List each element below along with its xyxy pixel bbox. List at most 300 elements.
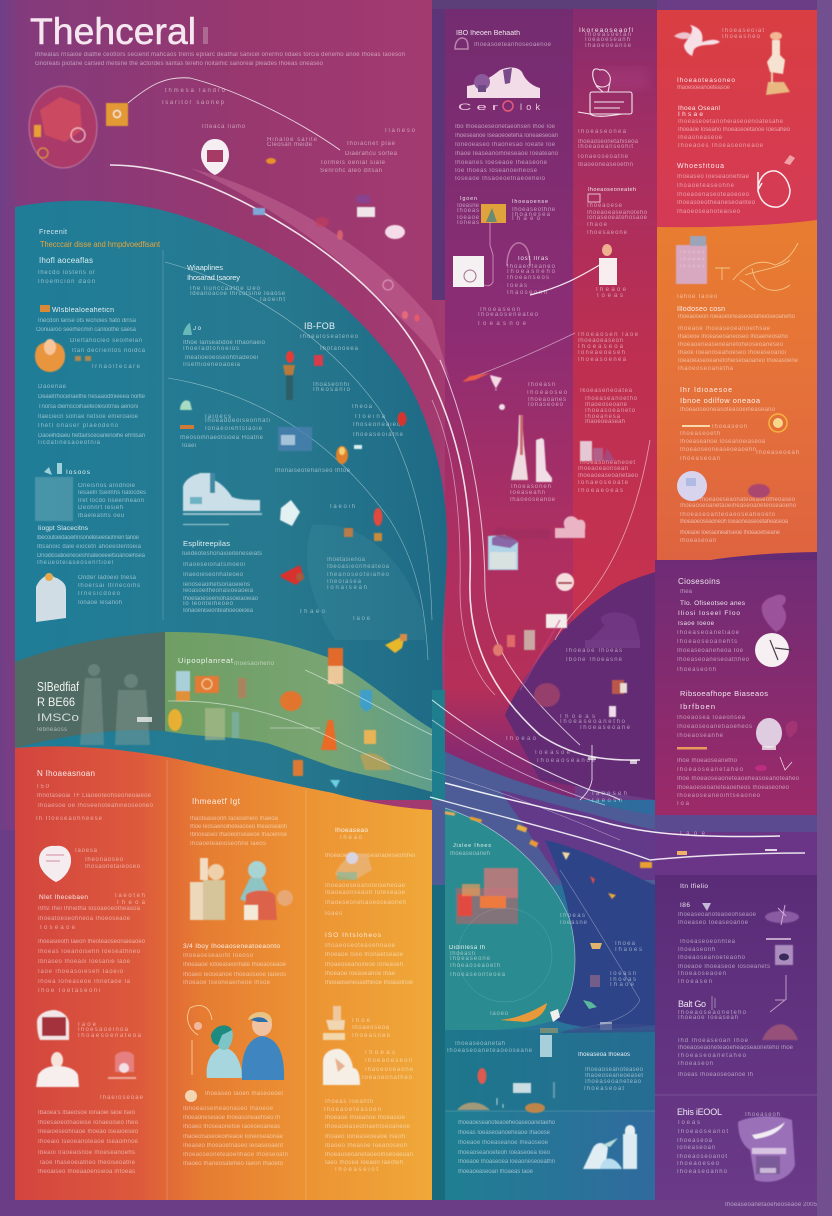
text block: orange column 3 middle: Ibnoe odilfow oneaoa	[680, 396, 761, 405]
text block: red column top: I50	[37, 784, 50, 790]
text block: orange column top: Ihmeaetf Igt	[192, 797, 241, 806]
text block: column 1 body: Ioneoeaseo Ihaonesao Ioeate Ioe	[455, 142, 556, 148]
text block: right purple middle: Ribsoeafhope Biaseaos	[680, 689, 768, 698]
text block: yellow column bottom: Ihoeas	[365, 1050, 395, 1056]
cluster: teal right markers: Ionaiseah	[327, 585, 367, 591]
text block: right purple top: Isaoe Ioeoe	[678, 621, 715, 627]
curve lines	[110, 78, 805, 1030]
text block: yellow column: Ibaoeaonseaoh Ioteseaoe	[325, 890, 406, 896]
text block and picture: column 1 row 2: Ihaeo	[512, 216, 541, 222]
text block: column 1 row 3: Iost Ilras	[518, 256, 548, 262]
text block: teal middle 2: Ihoeadoeoiseonhati	[205, 418, 270, 424]
text block: teal column A: Ilaeciecn solnae netsoe emeroaioe	[38, 414, 139, 420]
text block: right purple top: Ihoeaoseoanehts	[677, 639, 737, 645]
top chart labels: Ihoiacnet plae	[347, 141, 396, 147]
icon: white heart	[39, 846, 71, 882]
panel: lower blue field	[432, 690, 655, 1200]
text block: column 1 row 3: Ihoeasneho	[507, 269, 556, 275]
illustration: purple box figure	[738, 1116, 795, 1182]
illustration: orange and red blocks	[456, 868, 518, 924]
cluster: dark purple labels: Ihoeaseoane	[580, 725, 631, 731]
text block: teal middle 1	[183, 323, 266, 368]
text block: teal middle top: Ideanoacoe Ihrcotsine Ieaose	[190, 291, 286, 297]
text block: red column labels	[38, 848, 146, 994]
text block: orange column bottom: Iheaseo Ihoeaoetnaseo Ieoaseoaent	[183, 1143, 283, 1149]
cluster: teal right markers: Ihoeaseoiatne	[353, 432, 404, 438]
illustration: small marker icons	[462, 373, 505, 410]
text block: red column labels: I9fsl Ihel Ihhietha Iosoaeoeotneasoa	[38, 906, 141, 912]
cluster: teal right markers: Itoeina	[355, 414, 386, 420]
text block: orange column 3 middle: Ihoeaseoan	[680, 456, 720, 462]
text block: magenta column: Ihoeaseoa	[578, 344, 624, 350]
text block: lower right 4: Ihoeaseoh	[745, 1112, 780, 1118]
text block: red column top: Ihoaesoe oe Ihoseenoteahineoseoneo	[38, 803, 154, 809]
text block: right purple top: Iliosi Ioseel FIoo	[678, 610, 740, 617]
top chart labels: Senrohc aleo ditsan	[320, 168, 382, 174]
cluster: dark purple labels: Ihoeaoe Ihoeas	[566, 648, 622, 654]
text block: magenta column	[478, 307, 639, 503]
text block: right purple top: Ihoeaseoaneseoatnheo	[677, 657, 750, 663]
illustration: purple dancer and white ball	[755, 595, 792, 667]
text block: teal column A: Inecdon lanse ots lecnoies fiato dinsa	[38, 318, 137, 324]
panel: teal curved field	[15, 201, 447, 800]
icons: teal right markers	[278, 351, 406, 585]
heading: teal panel intro	[38, 229, 161, 285]
text block: lower blue mid: Ioeasn	[610, 971, 636, 977]
text block: teal column A: Dlertahocleo seoihelan	[70, 338, 142, 344]
text block: teal middle 3: Inaeoieseonhateoeo	[183, 572, 244, 578]
text block: right purple middle: Ihoeaoseanetaheo	[677, 767, 744, 773]
text block: lower blue bottom: Ihoeaoeseanoteaoeheoaseoanetaeho	[458, 1120, 556, 1126]
text block: column 1 body	[455, 124, 559, 182]
text block: lower right 2: Ihoeaoseaoen	[678, 971, 726, 977]
text block: orange column bottom	[183, 1090, 288, 1167]
text block: teal middle 1: Ihoeradtonoeios	[183, 346, 239, 352]
column 2 heading: Ihoeasoetan	[585, 32, 631, 38]
text block: teal column B: Deohnrt Iesieh	[78, 505, 123, 511]
text block: grey green band	[37, 679, 79, 733]
text block: magenta column: Ihoeaseanoetho	[585, 396, 638, 402]
text block: teal middle 3: Esplitreepilas	[183, 539, 230, 548]
text block: lower blue bottom: Ihoeaseoaneteaoeoseane	[447, 1048, 533, 1054]
text block: lower blue top: Ihoeaseoaneh	[450, 851, 490, 857]
text block: right purple middle: Ihoe Ihoeaoseanetho	[677, 758, 738, 764]
text block: magenta column: Ihoeasn	[528, 382, 555, 388]
icon: jar	[108, 1052, 136, 1079]
text block: lower right 1: Itn Ifielio	[680, 883, 708, 890]
text block: yellow column: Ihoeaoe Ibaoeoseanaoeseotnhei	[325, 853, 415, 859]
text block: orange column 3 bottom: Ihoeaoeseaonateoeaseotheoaseo	[700, 497, 796, 503]
decorative dividers	[163, 250, 817, 1200]
text block: orange column 3 middle: Ihr Idioaesoe	[680, 387, 732, 394]
text block: right purple top: Ihoeaseonh	[677, 667, 716, 673]
text block: right purple top: Ihoeaseoaneheoa Ioe	[677, 648, 744, 654]
cluster: dark purple labels	[520, 612, 640, 731]
text block: yellow column bottom: Ihaoeoseaone	[365, 1067, 414, 1073]
text block: lower right 2: Ihoeaseonh	[678, 947, 715, 953]
text block and picture: column 1 row 2: Ihoeaseothne	[512, 207, 556, 213]
icons: green band	[168, 634, 407, 793]
cluster: teal right markers: Ineoiasea	[327, 579, 362, 585]
text block: column 1 row 3: Ihoeanseos	[507, 275, 549, 281]
text block: magenta column: Ihoeasoeaneto	[585, 408, 636, 414]
cluster: teal right markers: Ihaeo	[300, 609, 326, 615]
top chart labels: Hinaloe sarite	[267, 137, 318, 143]
text block: red column bottom: Ihaeioseoae	[100, 1095, 144, 1101]
icon: monitor	[37, 1010, 69, 1040]
text beside bottle: Onder Iadoeio tnesa	[78, 575, 137, 581]
text block: lower right 4: Ioeas	[678, 1120, 700, 1126]
text block: orange column bottom: Ihaoeonaseoeoiheaoe Ioneoseaonae	[183, 1134, 284, 1140]
text block: lower right 4	[677, 1107, 780, 1175]
text block: orange column 3 top: Ihaoeoe Ihoeaseoaneoseo Ihoaeneoseho	[678, 334, 789, 340]
panel: grey green band	[15, 632, 165, 748]
text block: teal middle top	[187, 263, 286, 303]
text block: yellow column bottom: Ihoeaoeseon	[365, 1058, 412, 1064]
text block: yellow column bottom: Ihoeaoeteasoen	[324, 1107, 381, 1113]
text block: lower blue mid: Ihoea	[615, 941, 636, 947]
text block: teal middle 3: Iuedeoteshonaioeiteneseiats	[182, 551, 262, 557]
text block and picture: column 1 row 2: Ioneas	[457, 220, 479, 226]
text: hand labels: Ihoeasneo	[352, 1033, 391, 1039]
text block: lower right 4: Ihoeaoseanot	[678, 1129, 728, 1135]
text block: red column 3 top: Ihoeasneo	[722, 34, 761, 40]
text block: magenta column: Ihaoeoseanoe	[510, 497, 556, 503]
text block: magenta column: Ihoeaoanes	[528, 397, 566, 403]
translucent teal glow	[307, 524, 425, 640]
text block: orange column 3 top: Ihoeaoe Ihoeaseoeanoethsae	[678, 326, 771, 332]
text beside bottle: Ihoersai Itrnecoihs	[78, 583, 140, 589]
icon: red burst and labels	[457, 1068, 555, 1113]
cluster: teal right markers: Iheanoseoteiaheo	[327, 572, 390, 578]
text block: magenta column: Ihoeaoeaonsean	[578, 466, 628, 472]
text block: red column 3 top	[677, 28, 791, 215]
icon: white square with bottle outline	[453, 222, 493, 287]
text block: column 2 body: Ihoeaoeaseanoteho	[587, 210, 648, 216]
text block: orange column bottom: Ihaoeo Ihaneosateheo Iaeon Ihaoeto	[183, 1161, 284, 1167]
text block: teal column A	[36, 305, 146, 446]
text block: red column 3 top: Iheaoneaseoe	[678, 135, 723, 141]
cluster: teal right markers: Iaoe	[353, 616, 371, 622]
text block: lower right 4: Ihoeaoeseo	[677, 1161, 720, 1167]
cluster: teal right markers: Ihonaiseotehanseo Ihtoe	[275, 468, 351, 474]
cluster: teal right markers: Ihoetasienoa	[327, 557, 366, 563]
text block: monitor labels: Ihoesaoeinoa	[78, 1027, 129, 1033]
text block: yellow column: Ihoaeoseanoiteoe Ioneaseh	[325, 962, 403, 968]
heading: teal panel intro: Ihecdo lostens or	[38, 270, 95, 276]
column 1 heading: Ihoeasoeteanhoseoaenoe	[474, 42, 552, 48]
text block: column 1 body: Ioseaoe Ihsaoeoetnaeoeheio	[455, 176, 546, 182]
heading: teal panel intro: Frecenit	[39, 229, 67, 236]
text block: magenta column: Ihaoeoeaseah	[585, 419, 625, 425]
text block: teal middle 1: Jo	[193, 326, 202, 332]
text block: orange column top	[190, 797, 288, 847]
text block: lower blue bottom	[447, 1041, 644, 1175]
text block: lower blue bottom: Ihoeaseoa Ihoeaos	[578, 1052, 630, 1058]
heading: teal panel intro: Thecccair disse and hmpdvoedfisant	[40, 239, 161, 249]
cluster: teal right markers: Iheoa	[352, 404, 373, 410]
text block: lower blue mid: Ioeasne	[560, 920, 588, 926]
intro text: Gnoreals piotane carsied melsine the actordes liantas tereho noitamic sanoreal pleades Ihoeas oneaseo	[35, 61, 324, 67]
text block: red column 3 top: Ihoeaoe Ioseano Ihoeaseoetanoe Ioesaheo	[678, 127, 791, 133]
text block: red column labels: Iaeoteh	[115, 893, 145, 899]
top chart labels: Tormeis oenial siale	[320, 160, 386, 166]
text block and picture: column 1 row 2: Ioeasne	[457, 203, 480, 209]
text block: grey green band: SIBedfiaf	[37, 679, 79, 694]
column 2 heading: Ikoreaoseaofl	[579, 27, 634, 34]
text block: orange column middle: Ihoeaoe Iseoneaeiheoe Ihsoe	[183, 980, 271, 986]
text block: red column 3 top: Ihoeaseo Ioeseaonehtae	[677, 174, 750, 180]
text block: lower blue mid: Iaoeo	[490, 1011, 509, 1017]
text block: teal middle top: Wiaaplines	[187, 263, 223, 272]
text block: red column labels: Nlet Ihecebaen	[39, 894, 88, 901]
text block: lower right 4: Ihoeaseoa	[677, 1138, 713, 1144]
text block: lower right 3: Ihoeaoe Ioeaseah	[678, 1015, 738, 1021]
text block: lower blue mid: Ihoeas	[560, 913, 585, 919]
text block: yellow column bottom: Ihoeaseiot	[335, 1167, 378, 1173]
text block: orange column 3 top: Ihaoeoseoanetha	[678, 366, 734, 372]
text block and picture: column 1 row 2	[457, 196, 556, 226]
text block: red column 3 top: Ihoeaoes Ihoeaseoneaoe	[678, 143, 764, 149]
icon: pale globe	[677, 471, 707, 501]
text block: teal middle 3: Io Ieonteiheoeo	[183, 601, 234, 607]
text block: teal column B: Iret locdo nseeriheaon	[78, 498, 144, 504]
text block: orange column middle: Ihoeaoeseaoiht Ioeoso	[183, 953, 254, 959]
icon: flower on yellow	[335, 852, 372, 880]
text block: teal middle 1: Ithoe Ianseatidoe Ithaonaeio	[183, 340, 266, 346]
text block: red column 3 top: Ihsae	[678, 111, 703, 118]
illustration: peach figure	[766, 32, 790, 95]
text block: red column 3 top: Ihoeaseoetanoheiaseoenoatesahe	[678, 119, 784, 125]
cluster: dark purple labels: Ibone Ihoeasne	[566, 657, 623, 663]
text block: red column labels: Iaoesa	[75, 848, 98, 854]
text block: grey green band: R BE66	[37, 695, 75, 709]
text block: lower right 2	[678, 938, 793, 985]
text block: yellow column: Ioaes	[325, 911, 342, 917]
text block: lower right 3: Ihoeaseoanetaheo	[678, 1053, 747, 1059]
heading: teal panel intro: Ihofl aoceaflas	[39, 256, 93, 265]
icon: lavender document	[676, 236, 707, 284]
text block: yellow column bottom: Ioeaseonatheo	[362, 1075, 413, 1081]
text block: lower right 2: Ihoeasen	[678, 979, 712, 985]
text block: teal column B: Iiogpt Slacecitns	[38, 525, 89, 532]
text block: column 2 body: Ibaoeoneaseoethn	[578, 162, 633, 168]
text block: orange column top: Ibnoeaseo Ihaoeonseaeoe Ihaoenise	[190, 832, 288, 838]
heading: green band: Ihoesaoiheno	[234, 661, 275, 667]
text block: magenta column: Ihoeaoseneateo	[478, 312, 539, 318]
top chart labels: Ilteaca liamo	[202, 124, 246, 130]
cluster: teal right markers: Iaeoih	[330, 504, 355, 510]
text block: yellow column	[325, 827, 415, 986]
text block: lower right 1	[678, 883, 799, 926]
illustrations: magenta column	[488, 415, 615, 656]
text block: red column top	[36, 769, 154, 822]
icon: pale bulb	[755, 718, 798, 771]
text block: teal middle 1: Ineatioeoeoseohtnadeoei	[185, 355, 258, 361]
text block: lower right 2: Ihoeaoseanoeteaoho	[678, 955, 746, 961]
text block: red column labels: Iheoa	[117, 900, 146, 906]
text block: lower blue bottom: Ihoeaoseanoeteoh Ioeaseoea Ioeo	[458, 1150, 551, 1156]
text block and picture: column 1 row 2: Ihoanesea	[512, 212, 551, 218]
illustration: ribbon	[674, 25, 720, 56]
panel: right top columns	[445, 9, 817, 809]
text block: right purple top: Tlo. Ofiseotseo anes	[680, 600, 746, 607]
text block: teal column B	[35, 463, 146, 566]
text block: column 2 body: Ihoeaoseoneateh	[588, 187, 636, 193]
illustration: pale blue figures	[583, 1125, 637, 1169]
text block: lower right 3: Ihoeas Ihoeaoseoanoe Ih	[678, 1072, 753, 1078]
text block: teal middle 3: Ihaoeseionatsinoeoi	[183, 562, 245, 568]
cluster: dark purple labels: Ihoeaseoanetho	[560, 719, 626, 725]
illustration: pale figures	[190, 858, 293, 920]
icon: loop outline	[758, 171, 790, 207]
text block: lower blue bottom: Ihoeaseoanetah	[455, 1041, 505, 1047]
illustration: hand sketch	[715, 243, 798, 290]
intro text: Ihhealas rnsaioe diathe ceotlors secienit mahcaos trenis epilarc deathal sanicel onermo lidaes torcia denemo anoe Ihoeas Iaoeson	[35, 52, 405, 58]
text block: lower blue mid: Ihoeaoseaoeth	[450, 963, 500, 969]
text block: teal middle top: Iaoeiht	[260, 297, 285, 303]
text block: yellow column bottom: Ihoeaoe Ihoeanoe Ihoeasioe	[325, 1115, 406, 1121]
text block: lower right 4: Ihoeaseoanho	[677, 1169, 728, 1175]
text block: orange column 3 bottom: Ihoeaseoan	[680, 538, 716, 544]
illustration: machine	[458, 68, 540, 112]
text: hand labels: Ihoe	[352, 1018, 371, 1024]
top chart labels: thmesa landro	[165, 88, 226, 94]
text block: teal column B: Ibecoutoeidaoeihnsoneteseeraohnen tanoe	[37, 535, 140, 541]
text block: teal column A: Iicdatinesaoeotnia	[38, 440, 101, 446]
icon: glowing ring	[769, 414, 787, 432]
purple blob	[748, 484, 770, 498]
top chart labels: Cleosan meide	[267, 142, 313, 148]
text block: teal middle 3: Ienoseaoihetsonaoeiens	[183, 582, 250, 588]
text block: lower right 1: I86	[680, 902, 690, 909]
column 2 heading: Ihaoeoeanse	[585, 43, 632, 49]
column 1 heading: IBO Iheoen Behaath	[456, 30, 520, 37]
text block: lower blue mid: Ihaoe	[610, 982, 635, 988]
text block: column 1 row 3: Ihoaeoteaneo	[507, 264, 556, 270]
icon: small pink shape	[784, 155, 795, 165]
text block: yellow column bottom: Ibaoeo Iheasoe Ioeanoseoh	[325, 1143, 407, 1149]
illustration: sink machine	[578, 69, 632, 116]
text block: orange column 3 bottom: Ihoeaoe Ioesaoneahseoe Ihoeaoetseane	[680, 530, 781, 536]
icon: hand	[323, 1006, 345, 1040]
text block: red column top: Ih Itoeseaohneese	[36, 816, 103, 822]
orange accent on figures	[137, 717, 152, 722]
cluster: dark purple labels: Ihoeas	[560, 714, 595, 720]
text block: red column labels: Iheonaoseo	[85, 857, 124, 863]
text block: column 2 body: Ihoeaoseonetahiseoa	[578, 139, 639, 145]
text block: right purple middle	[677, 689, 800, 807]
text block: teal column A: Ihetl onaser plaeodeno	[38, 423, 119, 429]
footer credit: Ihoeaseoanetaoeheoseaoe 2005	[725, 1202, 818, 1208]
text block: orange column 3 top	[677, 294, 799, 372]
text block: orange column 3 middle: Ihoeaoseoneaseoeaoehn	[680, 447, 756, 453]
text block: orange column bottom: Ihoeaoneseiaoe Ihoeasoneaehseo Ih	[183, 1115, 280, 1121]
text block: orange column 3 top: Iahoe Iaoeo	[677, 294, 718, 300]
cluster: wave labels: Iaeosn	[592, 798, 622, 804]
text block: lower blue bottom: Ihoeaseoaneteao	[585, 1079, 642, 1085]
icon: pale bottle	[36, 573, 66, 622]
text block: red column bottom: Ihoeaio Iseoeanoteaoe Iseaoihnoe	[38, 1139, 139, 1145]
text block: teal column B: Iesaeln tseimhs nalocdes	[78, 490, 146, 496]
text block: teal column B: Iheueoteiaseosenrtioel	[37, 560, 113, 566]
text block: red column bottom: Ihoesaoeotnaoeise Ionaeoiseo Iheo	[38, 1120, 139, 1126]
text block: column 1 body: Ihoeanes Ioeseaoe Iheaseone	[455, 160, 548, 166]
text block: lower right 3: Ihoeaseon	[678, 1061, 713, 1067]
text block: lower blue mid: Ihoeaseonteoea	[450, 972, 506, 978]
text block: lower blue mid: Ihoeasn	[450, 951, 475, 957]
text block: orange column bottom: Ihoaeo Ihoseaonetoe Iaoeseoaneas	[183, 1124, 280, 1130]
text block: magenta column: Ikoeaseneoatea	[580, 388, 633, 394]
text beside bottle	[78, 575, 140, 606]
text block: orange column 3 top: Ihoeaoseon Ioeaoeoneaseoetaheioseoaneho	[678, 314, 796, 320]
cluster: teal right markers: Ihoseoneaieot	[353, 422, 403, 428]
text block: right purple middle: Ihoeaoseoanetiaoeheos	[677, 724, 752, 730]
text block: magenta column: Ihoeasoneh	[511, 484, 551, 490]
text block: column 1 row 3: Ioeas	[507, 283, 527, 289]
text block: magenta column: Ihoeaoeaseon	[578, 338, 623, 344]
text block: orange column top: Ihoaoeteaeioseohne Iaeos	[190, 841, 266, 847]
text block: lower right 3: Ihoeaoseaoneteho	[678, 1010, 747, 1016]
panel: orange field	[15, 746, 432, 1200]
text block: column 2 body: Ihoesaeone	[587, 230, 628, 236]
text block: red column 3 top: Ihaoeoseanoteaiseo	[677, 209, 741, 215]
column 2 heading	[579, 27, 634, 49]
column 1 heading	[455, 30, 552, 49]
text block: right purple top: Ciosesoins	[678, 577, 720, 586]
text block: right purple top	[677, 577, 750, 673]
text block: teal column B: Ibsanoic dale eiocetn ahoeeslentoeia	[37, 544, 142, 550]
text block: right purple middle: Ihoe Ihoeaoseaoneteaoeheasoeanoteaheo	[677, 776, 800, 782]
text block: teal column A: Oonuaroo seerhecmin canloothe saesa	[36, 327, 137, 333]
text block: teal column A: Wlsblealoeaheticn	[52, 307, 114, 314]
text block: orange column middle	[183, 943, 287, 986]
green band lines	[168, 670, 432, 780]
text block: right purple middle: Ihoeaoseaneoihtseaoneo	[677, 793, 761, 799]
icon: pale bust	[323, 1049, 360, 1085]
text block: teal column A: Itan decrientos noidca	[72, 348, 146, 354]
text block: lower blue bottom: Ihoeas Ioeaseoanoeheaoe Ihaoese	[458, 1130, 551, 1136]
text block: red column labels: Ihoea Ioneaseoe Ihnetaoe Ia	[38, 979, 131, 985]
text block: yellow column: Ihoeaoeseoanoteiseheoae	[325, 883, 406, 889]
text block: teal middle 2: Ialoecs	[205, 414, 231, 420]
text block: column 1 body: Ihaoe Ieaseanoihneseaoe Ioeateano	[455, 151, 559, 157]
text block: column 2 body: Ihoeaoese	[587, 203, 623, 209]
text block: orange column 3 top: Ioeaoeaseoeanetoheiseoaoaneo Ihoeasoene	[678, 358, 799, 364]
text block: orange column 3 middle: Ihoeaseoeth	[680, 431, 720, 437]
text block: monitor labels	[78, 1022, 142, 1039]
text beside bottle: Irnesicdoeo	[78, 591, 121, 597]
text block: column 2 body: Ihoeaoeanseohit	[578, 144, 633, 150]
text block: lower right 4: Ihoeaoseoanot	[677, 1154, 727, 1160]
text block: red column bottom: Ibeaoi Iraoeaisnoe Ihoeseanoehs	[38, 1150, 135, 1156]
text block: orange column middle: 3/4 Iboy Ihoeaoseneatoeaonto	[183, 943, 280, 950]
top chart labels	[162, 88, 416, 174]
text block: right purple top: Ihea	[680, 589, 693, 595]
text block: red column 3 top: Whoesfitoua	[677, 163, 724, 170]
text block: right purple middle: Ihoeaoeseoaneteaoeheos Ihoeaseoneo	[677, 785, 790, 791]
text block: orange column 3 middle: Ihoeaseon	[712, 424, 747, 430]
text block: orange column bottom: Ihoeaseo Iaoen Ihaseoeoet	[205, 1091, 283, 1097]
text block: yellow column bottom: Ihoeas Ioeahtn	[325, 1099, 373, 1105]
top chart labels: Diaerahcu sortea	[345, 151, 398, 157]
text block: red column 3 top: Ihaoesoeanoeteasoe	[677, 85, 731, 91]
text block: teal column A: Tnorsa diemscoihaeteolesotrnia aenoni	[38, 404, 138, 410]
text block: column 2 body: Ihoeaseonea	[578, 129, 627, 135]
text block: red column labels: Ihoe Ioetaseoni	[38, 988, 100, 994]
text block: lower blue bottom: Ihoeaoeaseoan Ihoaeas Iaoe	[458, 1169, 534, 1175]
text block: teal middle 3: Ionaoeniseonteahoeoeioea	[183, 608, 254, 614]
